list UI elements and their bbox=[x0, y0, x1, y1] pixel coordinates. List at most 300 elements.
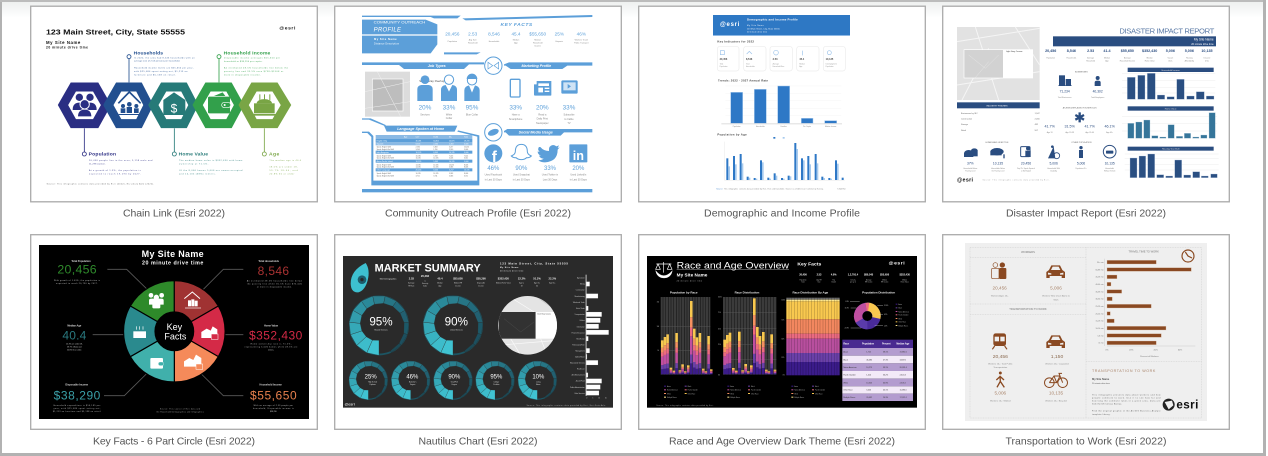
slice icons bbox=[133, 292, 218, 369]
card: Community Outreach Profile: Median bbox=[534, 40, 541, 42]
demographic stats bbox=[409, 274, 557, 281]
card: Nautilus Chart: 46% bbox=[406, 374, 419, 380]
legends: Asian bbox=[794, 385, 798, 388]
source note: Source: This source of Esri data and bbox=[160, 407, 200, 410]
text: home value: The median home value is $352,430 with home bbox=[179, 159, 243, 162]
card: Nautilus Chart: Average bbox=[408, 282, 414, 285]
card: Nautilus Chart: 10% bbox=[532, 374, 545, 380]
language table: 7,413 bbox=[449, 155, 453, 157]
race table: Native American bbox=[843, 366, 857, 369]
card: Disaster Impact Report: Units bbox=[1168, 59, 1172, 62]
section bands bbox=[362, 62, 592, 192]
key facts: Population bbox=[799, 278, 807, 281]
at risk population: 41.7% bbox=[1044, 125, 1056, 129]
trends chart: Households bbox=[756, 126, 765, 128]
card: Demographic and Income Profile: 45.4 bbox=[799, 58, 805, 61]
esri logo: @esri bbox=[957, 178, 974, 184]
card: Community Outreach Profile: Marketing Profile bbox=[521, 64, 551, 68]
card: Demographic and Income Profile: Total bbox=[720, 62, 724, 65]
connector: age bbox=[262, 128, 266, 156]
businesses: 71,234 bbox=[1060, 90, 1070, 94]
donut bbox=[124, 281, 225, 382]
text: home value: ownership at 71.5%. bbox=[179, 162, 209, 165]
worker stats bbox=[991, 285, 1071, 301]
figures panel: Retail bbox=[961, 129, 967, 132]
trends chart: Population bbox=[733, 125, 741, 128]
race table: 36.2% bbox=[883, 375, 889, 377]
social percentages: 20% bbox=[572, 166, 585, 172]
icon: house with family bbox=[118, 92, 141, 115]
at risk population: 41.7% bbox=[1084, 125, 1096, 129]
card: Community Outreach Profile: TV bbox=[567, 122, 571, 125]
map circle: Dark Gray Canvas bbox=[537, 314, 551, 316]
stat: median age: 59.7% 18-64, and bbox=[67, 346, 82, 348]
esri logo: esri bbox=[1176, 399, 1198, 412]
bar chart: travel time: 45-59 min bbox=[1096, 277, 1104, 279]
language table: 2,530 bbox=[433, 144, 438, 146]
legends: Black bbox=[815, 386, 819, 388]
job and marketing percentages bbox=[419, 105, 576, 112]
chart titles: Race Distribution bbox=[735, 290, 760, 294]
card: Community Outreach Profile: Distance Description bbox=[374, 42, 400, 45]
language table: 10,135 bbox=[433, 158, 438, 160]
card: Nautilus Chart: Degree bbox=[410, 384, 415, 386]
stat: home value bbox=[245, 324, 303, 352]
key facts: $352,430 bbox=[899, 274, 910, 277]
card: Community Outreach Profile: Newspaper bbox=[536, 122, 549, 125]
card: Disaster Impact Report: Units bbox=[1205, 59, 1209, 62]
stat: total households: the poverty line while 35.5% have $75,000 bbox=[247, 282, 302, 285]
text: households: Household income levels are $55,650 per year, bbox=[134, 67, 194, 70]
chart: housing by age bbox=[1125, 147, 1219, 178]
race table: 31,880.1 bbox=[900, 352, 907, 354]
chart: population by race: 150 bbox=[657, 302, 659, 304]
stat: disposable income: Household expenditure is $56,185 per bbox=[54, 404, 101, 407]
card: Community Outreach Profile: Used Facebook bbox=[485, 174, 503, 177]
card: Community Outreach Profile: Services bbox=[420, 113, 431, 116]
text: home value: Of the 8,006 homes 5,006 are owner-occupied bbox=[179, 169, 243, 172]
card: Nautilus Chart: Linked Services bbox=[450, 329, 463, 331]
figures panel: Storage bbox=[961, 123, 969, 126]
card: Demographic and Income Profile: Average bbox=[773, 62, 779, 65]
card: Chain Link bbox=[31, 6, 317, 220]
text: age: 18.5% are under 18, bbox=[269, 166, 298, 169]
language table bbox=[376, 135, 472, 177]
card: Community Outreach Profile: Read a bbox=[538, 113, 547, 116]
card: Nautilus Chart: 25% bbox=[365, 374, 377, 380]
businesses: BUSINESSES bbox=[1075, 71, 1088, 73]
key facts: 2.53 bbox=[468, 32, 478, 37]
card: Community Outreach Profile: PROFILE bbox=[374, 28, 402, 34]
card: Race and Age Overview bbox=[639, 235, 925, 448]
legends: Multiple Races bbox=[667, 396, 677, 399]
language table: 10,135 bbox=[416, 152, 421, 154]
footer bbox=[345, 403, 607, 407]
text: household income: Disposable income averages $55,650 per bbox=[224, 57, 280, 60]
site info: This infographic presents data about workers and how bbox=[1092, 394, 1161, 397]
card: Nautilus Chart: Disposable bbox=[477, 283, 485, 285]
race table: Pacific Islander bbox=[843, 375, 856, 377]
source: Source: This infographic contains data provided by Esri. bbox=[656, 404, 714, 407]
caption: Disaster Impact Report (Esri 2022) bbox=[1006, 208, 1166, 220]
race table: White bbox=[843, 381, 848, 384]
header bbox=[713, 15, 850, 36]
bottom icons bbox=[963, 141, 1116, 173]
key facts: HH Income bbox=[881, 281, 889, 283]
card: Nautilus Chart bbox=[335, 235, 621, 448]
card: Disaster Impact Report: Average bbox=[1087, 56, 1094, 59]
key facts: Median bbox=[882, 279, 887, 281]
key facts bbox=[445, 22, 586, 37]
race table: 5,006 bbox=[866, 390, 871, 392]
figures panel bbox=[957, 102, 1041, 132]
card: Nautilus Chart: 90% bbox=[445, 315, 468, 328]
bar chart: Wholesale Trade bbox=[573, 301, 585, 304]
language table: 30,091 bbox=[416, 140, 421, 142]
race table: 2,303.2 bbox=[900, 382, 906, 384]
chart: race distribution by age: 100% bbox=[781, 299, 786, 301]
chart: race distribution by age: 0% bbox=[783, 375, 785, 377]
bar chart: Admin/Waste bbox=[575, 356, 585, 359]
figures panel: Businesses by SIC bbox=[961, 113, 978, 115]
card: Nautilus Chart: Site Demographics bbox=[380, 278, 396, 281]
worker stats: Workers Ages 16+ bbox=[991, 295, 1009, 298]
chart: population by race bbox=[657, 297, 713, 375]
stat: median age: 20.8% 65 or older. bbox=[67, 349, 82, 351]
connector: population bbox=[82, 128, 86, 156]
bottom icons: Poverty Level bbox=[965, 170, 976, 173]
key indicators: Key Indicators for 2022 bbox=[717, 39, 754, 43]
card: Nautilus Chart: Living bbox=[536, 382, 541, 384]
race table: 20,331.4 bbox=[900, 367, 907, 369]
legends: White bbox=[667, 392, 671, 395]
card: Demographic and Income Profile: Age bbox=[799, 65, 802, 68]
header: Demographic and Income Profile bbox=[747, 18, 798, 22]
key facts: Size bbox=[818, 281, 821, 283]
at risk population: Age 19-39 bbox=[1065, 131, 1074, 134]
card: Nautilus Chart: Income bbox=[455, 285, 461, 287]
text: age: 20.8% 65 or older bbox=[269, 173, 295, 176]
text: population: expected to reach 19,190 by 2027. bbox=[89, 173, 141, 176]
transport stats upper: 1,150 bbox=[1051, 354, 1063, 360]
text: household income: household or $38,290 per capita. bbox=[224, 60, 263, 63]
caption: Nautilus Chart (Esri 2022) bbox=[418, 436, 538, 448]
card: Demographic and Income Profile: Population bbox=[826, 65, 834, 68]
text: home value bbox=[179, 152, 243, 176]
address bbox=[500, 262, 568, 272]
text: age: Age bbox=[269, 152, 280, 158]
job and marketing percentages: 33% bbox=[509, 105, 522, 112]
banner bbox=[1053, 36, 1216, 46]
text: household income: An estimated 28.5% households live below the bbox=[224, 67, 289, 70]
title bbox=[677, 261, 790, 283]
caption: Transportation to Work (Esri 2022) bbox=[1006, 436, 1166, 448]
caption: Race and Age Overview Dark Theme (Esri 2022) bbox=[669, 436, 895, 448]
text: households: Households bbox=[134, 50, 163, 56]
icons: job types bbox=[417, 74, 480, 101]
icon: car 2 bbox=[1046, 335, 1065, 348]
population by age chart: Population by Age bbox=[717, 133, 747, 137]
bottom icons: Pop 25+ Speak Spanish bbox=[1017, 168, 1035, 170]
race table: 10,273 bbox=[866, 367, 872, 369]
card: Nautilus Chart: High School bbox=[368, 382, 378, 384]
key facts: 46% bbox=[577, 32, 586, 37]
bottom icons: 10,135 bbox=[1105, 162, 1115, 166]
key facts: Density bbox=[851, 278, 856, 281]
center label: Key bbox=[167, 322, 183, 332]
source: Source: This infographic contains data provided by Esri (2022), Esri-Data Axle (2022). bbox=[47, 183, 154, 186]
card: Disaster Impact Report: Population bbox=[1046, 56, 1055, 59]
stat: household income: household, Disposable income is bbox=[253, 408, 294, 410]
language table: Other Language bbox=[377, 169, 390, 172]
title: 20 minute drive time bbox=[142, 261, 203, 267]
language table: 19,720 bbox=[464, 140, 470, 142]
card: Demographic and Income Profile: Unemployment bbox=[826, 62, 837, 65]
card: Community Outreach Profile: Collar bbox=[446, 117, 452, 120]
language table: 8,006 bbox=[464, 167, 468, 169]
language table: Speak English Not Well bbox=[377, 157, 395, 160]
trends chart: Trends: 2022 - 2027 Annual Rate bbox=[718, 78, 768, 82]
card: Community Outreach Profile: My Site Name bbox=[374, 37, 397, 41]
stat: disposable income: $1,213 on furniture and $5,138 on retail. bbox=[53, 410, 102, 413]
legends: Pacific Islander bbox=[815, 389, 826, 392]
race table: 1,414 bbox=[866, 375, 871, 377]
chart: race distribution: 100% bbox=[718, 297, 722, 299]
legends: Other Race bbox=[751, 392, 759, 395]
legends: Asian bbox=[667, 385, 671, 388]
language table: Asian-Pacific Island bbox=[377, 160, 393, 163]
card: Community Outreach Profile: in Last 30 Days bbox=[570, 178, 588, 181]
bottom icons: 5,006 bbox=[1077, 162, 1085, 166]
card: Nautilus Chart: Age 0- bbox=[519, 282, 525, 285]
language table: Speak English Not Well bbox=[377, 166, 395, 169]
chart: race distribution: 0% bbox=[718, 374, 721, 376]
key facts: 45.4 bbox=[511, 32, 521, 37]
esri logo: Source: This infographic contains data provided by Esri. bbox=[983, 179, 1050, 182]
key facts: $80,545 bbox=[864, 274, 874, 277]
chart: race distribution: 50% bbox=[718, 328, 722, 330]
bar chart: Mining bbox=[580, 284, 585, 286]
chart: household income: Household Income bbox=[1162, 70, 1180, 72]
race table: Multiple Races bbox=[843, 396, 855, 399]
card: Nautilus Chart: Age 65+ bbox=[549, 282, 555, 285]
worker stats: 20,456 bbox=[993, 285, 1007, 290]
at risk population: AT-RISK/DISPLACED HOUSEHOLDS bbox=[1063, 106, 1097, 109]
card: Disaster Impact Report: Vacant bbox=[1168, 56, 1174, 59]
race table: 11,586.0 bbox=[900, 390, 907, 392]
trends chart: Median Income bbox=[825, 126, 836, 128]
card: Disaster Impact Report: Disaster bbox=[1204, 56, 1211, 59]
race table: Asian bbox=[843, 351, 848, 354]
card: Community Outreach Profile: Language Spoken at Home bbox=[397, 127, 444, 131]
legends: Other Race bbox=[815, 392, 823, 395]
text: age: The median age is 40.4 bbox=[269, 160, 302, 162]
icon: wallet bbox=[208, 92, 231, 113]
card: Demographic and Income Profile: Population bbox=[720, 65, 728, 68]
text: home value: and 10,135 (38%) renters. bbox=[179, 173, 216, 176]
map circle bbox=[497, 295, 559, 355]
stats row bbox=[1045, 49, 1213, 53]
race table: Population bbox=[862, 343, 875, 346]
key facts: 1,2,791.4 bbox=[848, 274, 859, 277]
text: households: In 2022, the area had 8,546 households with an bbox=[134, 57, 195, 60]
donut labels: 12.0% bbox=[884, 305, 889, 307]
language table: 10,135 bbox=[416, 161, 421, 163]
card: Nautilus Chart: Bachelor's bbox=[409, 382, 417, 384]
title: 20 minute drive time bbox=[677, 280, 702, 283]
dashed layout lines bbox=[970, 247, 1202, 418]
card: Community Outreach Profile: Household bbox=[533, 43, 542, 45]
key facts: 4.0% bbox=[831, 274, 837, 277]
caption: Demographic and Income Profile bbox=[704, 208, 860, 220]
key facts: $55,650 bbox=[529, 32, 546, 37]
bar chart: travel time: 20-24 min bbox=[1096, 313, 1104, 315]
card: Nautilus Chart: 95% bbox=[490, 374, 503, 380]
language table: 2,530 bbox=[416, 147, 420, 149]
bar chart: travel time: 40% bbox=[1154, 349, 1158, 351]
headings bbox=[1009, 250, 1159, 311]
card: Disaster Impact Report: Median bbox=[1147, 57, 1153, 59]
language table: 5,006 bbox=[464, 161, 469, 163]
stat: median age: 40.4 bbox=[62, 329, 87, 343]
bar chart: Arts/Entertainment bbox=[572, 374, 585, 377]
job and marketing percentages: 33% bbox=[563, 105, 576, 112]
legends: Pacific Islander bbox=[751, 389, 762, 392]
card: Disaster Impact Report bbox=[943, 6, 1229, 220]
language table: 8,345 bbox=[433, 152, 438, 154]
language table: 10,135 bbox=[464, 170, 470, 172]
businesses: Total Businesses bbox=[1058, 96, 1072, 99]
bar chart: Educational Services bbox=[570, 362, 585, 365]
key facts: 20,456 bbox=[799, 274, 807, 277]
donut labels: 15.7% bbox=[845, 308, 850, 310]
bar chart: travel time: 90+ min bbox=[1097, 262, 1104, 264]
trends chart: Per Capita bbox=[803, 125, 811, 128]
language table: 8,546 bbox=[416, 144, 420, 146]
stat: total population: Total Population bbox=[71, 260, 91, 263]
card: Community Outreach Profile: in Last 30 Days bbox=[485, 178, 503, 181]
demographic stats: 51.2% bbox=[533, 277, 541, 281]
donut labels bbox=[845, 301, 889, 330]
site name: My Site Name bbox=[46, 40, 81, 45]
card: Nautilus Chart: 18 bbox=[521, 285, 523, 287]
trends chart bbox=[718, 78, 842, 128]
key facts: 2.53 bbox=[817, 274, 822, 277]
figures panel: INDUSTRY FIGURES bbox=[986, 105, 1008, 107]
language table: 10,135 bbox=[416, 155, 421, 157]
card: Community Outreach Profile: Median bbox=[513, 40, 519, 42]
language table: 10,135 bbox=[433, 167, 438, 169]
race table: 3,049.6 bbox=[900, 359, 906, 361]
chart: housing by age: Housing Year Built bbox=[1162, 148, 1180, 151]
bar chart: travel time: 35-39 min bbox=[1096, 291, 1104, 293]
bar chart: Healthcare bbox=[577, 368, 585, 371]
at risk population: Age 19 bbox=[1047, 131, 1053, 134]
figures panel: Construction bbox=[961, 117, 972, 120]
language table: 24,871 bbox=[449, 140, 455, 142]
stat: median age bbox=[62, 324, 87, 351]
bar chart: Accom/Food bbox=[576, 380, 585, 383]
card: Demographic and Income Profile: 20,456 bbox=[720, 58, 728, 61]
language table: 7,413 bbox=[433, 155, 438, 157]
bottom icons: the Poverty Level bbox=[992, 170, 1005, 173]
language table: 5,363 bbox=[433, 147, 438, 149]
title: 123 Main Street, City, State 55555 bbox=[46, 29, 185, 36]
site info: 20 minute drive time bbox=[1092, 382, 1111, 385]
bar chart: 15 bbox=[605, 398, 607, 400]
card: Demographic and Income Profile: Total bbox=[746, 62, 750, 65]
language table: 3,711 bbox=[464, 175, 468, 177]
legends: White bbox=[730, 392, 734, 395]
race table: Median Age bbox=[896, 343, 910, 346]
icons: social media: f bbox=[492, 149, 498, 166]
site info: from the US Census Bureau. bbox=[1092, 403, 1122, 406]
chart: race distribution: 75% bbox=[718, 312, 722, 314]
stat: total population: 20,456 bbox=[57, 263, 97, 277]
stat: total households: An estimated 28.5% households live below bbox=[247, 279, 303, 282]
figures panel: 482 bbox=[1035, 124, 1038, 126]
icons: social media: in bbox=[573, 149, 584, 163]
card: Community Outreach Profile: Workers Travel bbox=[575, 39, 589, 42]
text: households bbox=[134, 50, 195, 77]
card: Nautilus Chart: HH Size bbox=[408, 285, 414, 287]
donut legend: Black bbox=[898, 308, 902, 310]
language table: 64,812 bbox=[433, 140, 439, 142]
chart: population by race: 50 bbox=[657, 350, 659, 352]
language table: English Only bbox=[377, 140, 387, 142]
stat: total population: expected to reach 20,730 by 2027. bbox=[56, 282, 98, 285]
language table: 1,150 bbox=[433, 149, 438, 151]
race table: Percent bbox=[882, 343, 891, 346]
card: Community Outreach Profile bbox=[335, 6, 621, 220]
report title: DISASTER IMPACT REPORT bbox=[1119, 27, 1215, 36]
card: Community Outreach Profile: Used LinkedIn bbox=[570, 174, 587, 177]
map: Single Gray Overlay bbox=[419, 80, 445, 83]
stat: median age: Median Age bbox=[67, 324, 82, 327]
legends: Multiple Races bbox=[730, 396, 740, 399]
social percentages bbox=[487, 166, 585, 172]
stats row: 5,006 bbox=[1185, 49, 1194, 53]
legends: White bbox=[794, 392, 798, 395]
demographic stats: 20,282 bbox=[421, 274, 430, 278]
card: Community Outreach Profile: Public Transport bbox=[574, 42, 589, 45]
connector: household income bbox=[217, 55, 221, 82]
stat: total population: With growth of 1.03%, the population is bbox=[54, 279, 100, 282]
circular emblems bbox=[485, 57, 502, 141]
icon: scales bbox=[656, 262, 672, 278]
card: Community Outreach Profile: Have a bbox=[512, 113, 520, 116]
language table: Speak English Well bbox=[377, 147, 392, 149]
language table: 8,006 bbox=[464, 173, 468, 175]
language table: 10,135 bbox=[416, 173, 421, 175]
language table: 5,006 bbox=[464, 144, 469, 146]
connector: home value bbox=[172, 128, 176, 156]
title: Race and Age Overview bbox=[677, 261, 790, 271]
bottom icons: 10,135 bbox=[993, 162, 1003, 166]
population by age chart bbox=[716, 133, 846, 191]
card: Community Outreach Profile: Used Twitter in bbox=[542, 174, 559, 177]
icon: clock bbox=[1182, 250, 1194, 262]
race table: 1,725 bbox=[866, 352, 871, 354]
transport stats lower: Workers 16+: Walked bbox=[990, 399, 1011, 402]
job and marketing percentages: 33% bbox=[443, 105, 456, 112]
text: households: with $25,084 spent eating out, $1,213 on bbox=[134, 70, 188, 73]
bar chart: travel time: 5-9 min bbox=[1098, 335, 1104, 337]
card: Community Outreach Profile: COMMUNITY OUTREACH bbox=[374, 20, 425, 25]
text: population: 11,298 women. bbox=[89, 163, 106, 165]
stat: total households: or more in disposable income. bbox=[257, 286, 292, 288]
key facts: 8,546 bbox=[488, 32, 500, 37]
